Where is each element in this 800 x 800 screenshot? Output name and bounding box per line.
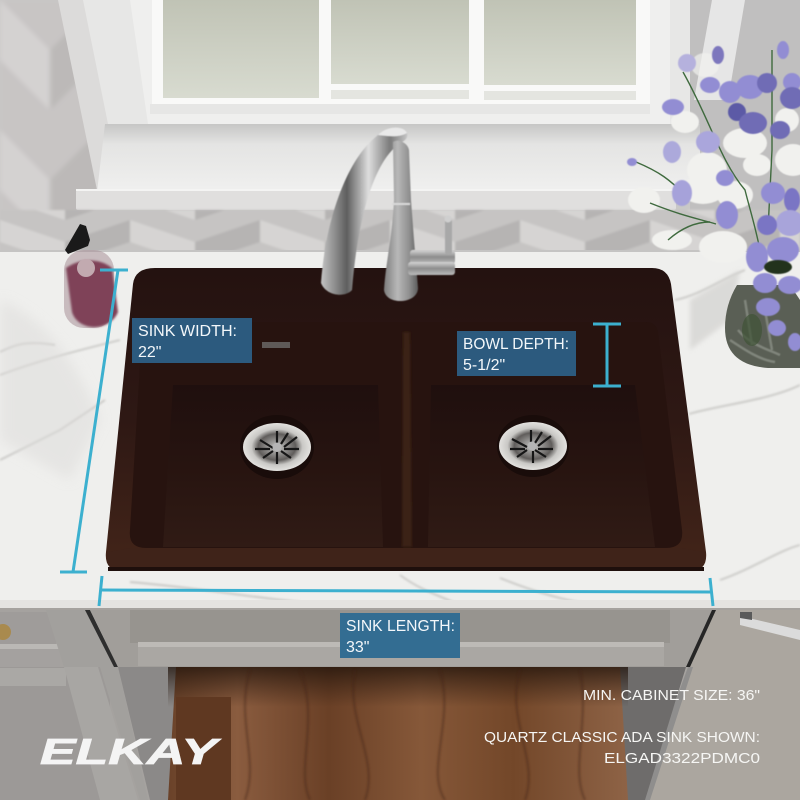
countertop xyxy=(0,250,800,608)
label: sink length: SINK LENGTH: xyxy=(346,618,455,635)
dimension: bowl depth line xyxy=(593,323,621,386)
logo: Elkay: ELKAY xyxy=(40,731,221,772)
label: sink width xyxy=(132,318,252,363)
soap bottle xyxy=(64,224,118,328)
label: sink width: 22" xyxy=(138,344,161,361)
caption: sink model shown xyxy=(484,729,760,767)
right marble wall xyxy=(690,0,800,250)
left bowl xyxy=(163,385,383,547)
window xyxy=(83,0,690,124)
herringbone backsplash xyxy=(0,210,800,252)
caption: sink model shown: QUARTZ CLASSIC ADA SINK SHOWN: xyxy=(484,729,760,746)
label: sink length xyxy=(340,613,460,658)
flowers xyxy=(627,41,800,351)
left marble wall xyxy=(0,0,110,252)
dimension: sink length line xyxy=(99,576,713,606)
window sill xyxy=(76,124,700,210)
caption: minimum cabinet size: MIN. CABINET SIZE: 36" xyxy=(583,687,760,704)
brand plate xyxy=(262,342,290,348)
cabinet xyxy=(0,608,800,800)
floor under cabinet xyxy=(118,667,686,800)
front rim highlight xyxy=(107,548,705,571)
right bowl xyxy=(428,385,655,547)
divider xyxy=(402,332,412,547)
label: sink length: 33" xyxy=(346,639,369,656)
label: bowl depth: 5-1/2" xyxy=(463,357,505,374)
label: sink width: SINK WIDTH: xyxy=(138,323,237,340)
caption: sink model shown: ELGAD3322PDMC0 xyxy=(604,750,760,767)
sink outer deck xyxy=(106,268,706,571)
faucet xyxy=(321,128,455,301)
label: bowl depth: BOWL DEPTH: xyxy=(463,336,569,353)
label: bowl depth xyxy=(457,331,576,376)
right drain xyxy=(497,415,569,477)
sink inner recess xyxy=(130,322,682,548)
sink xyxy=(106,268,706,571)
dimension: sink width line xyxy=(60,270,128,572)
flower vase xyxy=(725,285,800,368)
left drain xyxy=(240,415,314,479)
